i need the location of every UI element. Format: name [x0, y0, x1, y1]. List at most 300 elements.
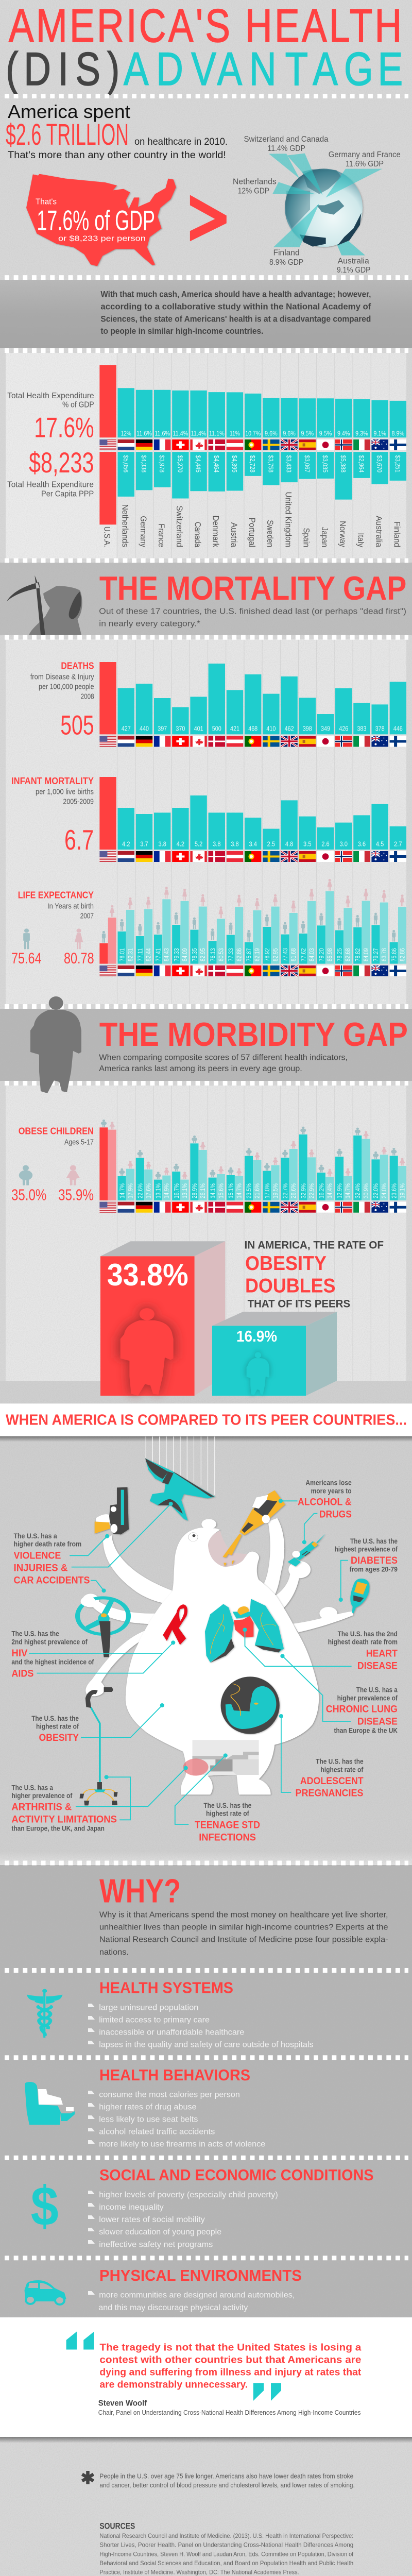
deaths values: 398 [303, 725, 312, 733]
callout: diabetes [335, 1537, 398, 1573]
footnote text: and cancer, better control of blood pressure and cholesterol levels, and lower rates of smoking. [99, 2482, 355, 2489]
callout: alcohol and drugs: DRUGS [319, 1509, 352, 1520]
callout: chronic lung disease: CHRONIC LUNG [326, 1704, 398, 1715]
callout: heart disease [328, 1630, 398, 1671]
callout: alcohol and drugs: ALCOHOL & [298, 1497, 352, 1508]
infant values: 3.8 [158, 841, 166, 848]
heading: SOCIAL AND ECONOMIC CONDITIONS [99, 2166, 374, 2184]
icon: bottle [223, 1490, 285, 1567]
callout: violence, injuries, car accidents: INJURIES & [13, 1562, 68, 1573]
bullet text: more communities are designed around automobiles, [99, 2291, 295, 2300]
obesity values: 14.7% [118, 1183, 126, 1198]
bullet list: slower education of young people [99, 2228, 221, 2236]
per capita values: $5,056 [122, 455, 130, 472]
globe labels: Germany and France [329, 150, 401, 159]
map text: or $8,233 per person [58, 234, 146, 243]
quote text: The tragedy is not that the United States is losing a [99, 2342, 362, 2353]
footnote text: People in the U.S. over age 75 live longer. Americans also have lower death rates from stroke [99, 2472, 353, 2480]
icon: caduceus [27, 1989, 62, 2038]
intro paragraph band: according to a collaborative study within the National Academy of [100, 302, 371, 311]
icon: ribbon [163, 1604, 187, 1645]
percent values: 11.4% [173, 430, 188, 437]
life expectancy values: 82.95 [271, 948, 279, 961]
country names: Australia [374, 516, 383, 548]
country names: U.S.A. [102, 527, 111, 547]
life expectancy values: 77.62 [299, 948, 307, 961]
infant values: 4.5 [376, 841, 384, 848]
bullet text: and this may discourage physical activity [98, 2303, 248, 2312]
icon: male legend [23, 928, 30, 949]
infant values: 3.8 [231, 841, 239, 848]
subheading [99, 607, 406, 629]
globe labels: 8.9% GDP [269, 258, 303, 267]
deaths values: 410 [266, 725, 276, 733]
callout: violence, injuries, car accidents [13, 1532, 90, 1586]
callout: alcohol and drugs: more years to [311, 1487, 352, 1495]
globe [285, 168, 363, 247]
chart left labels: Total Health Expenditure [7, 392, 94, 400]
flag row [99, 965, 406, 976]
intro paragraph band: Sciences, the state of Americans' health is at a disadvantage compared [100, 314, 371, 324]
obesity doubles text: THAT OF ITS PEERS [248, 1298, 350, 1310]
callout: arthritis and activity limitations: ARTHRITIS & [11, 1802, 72, 1813]
country names: Italy [356, 533, 365, 548]
strings [146, 1436, 215, 1495]
quote text: are demonstrably unnecessary. [99, 2379, 248, 2391]
percent values: 9.5% [301, 430, 314, 437]
icon: gun [95, 1487, 129, 1534]
bullet list: inaccessible or unaffordable healthcare [99, 2028, 244, 2037]
icon: opening quote marks [66, 2332, 94, 2349]
obesity values: 22.9% [307, 1183, 315, 1198]
flag row [99, 736, 406, 747]
callout: arthritis and activity limitations: higher prevalence of [11, 1792, 73, 1800]
callout: obesity: highest rate of [36, 1723, 79, 1731]
deaths values: 446 [393, 725, 403, 733]
sources heading: SOURCES [99, 2521, 135, 2531]
life expectancy values: 82.19 [253, 948, 261, 961]
icon: fetus in womb [221, 1676, 280, 1734]
country names: Netherlands [121, 504, 130, 547]
bear body [126, 1519, 319, 1794]
deaths labels: per 100,000 people [39, 683, 94, 691]
obesity values: 17.0% [263, 1183, 271, 1198]
callout: HIV and AIDS: AIDS [11, 1668, 33, 1679]
callout: alcohol and drugs: Americans lose [305, 1479, 352, 1487]
life expectancy values: 77.43 [281, 948, 289, 961]
life expectancy values: 82.31 [126, 948, 134, 961]
chart: infant mortality [11, 775, 406, 862]
bullet list: ineffective safety net programs [99, 2240, 213, 2249]
spending text block [6, 101, 228, 161]
paragraph: Why is it that Americans spend the most money on healthcare yet live shorter, [99, 1911, 388, 1920]
footnote [82, 2471, 355, 2489]
deaths bars [99, 662, 406, 734]
deaths values: 370 [176, 725, 185, 733]
obesity values: 15.1% [227, 1183, 235, 1198]
beam behind globe: Australia [334, 237, 365, 256]
life expectancy values: 84.43 [163, 948, 170, 961]
deaths labels: 505 [60, 710, 94, 740]
country names: United Kingdom [283, 492, 293, 547]
bullet list: alcohol related traffic accidents [99, 2128, 215, 2137]
callout: chronic lung disease: The U.S. has a [356, 1686, 398, 1694]
flag row [99, 851, 406, 862]
callout: heart disease: The U.S. has the 2nd [338, 1630, 398, 1638]
icon: closing quote marks [253, 2383, 281, 2401]
life expectancy values: 77.41 [154, 948, 162, 961]
bullet markers [88, 2091, 95, 2144]
heading: HEALTH BEHAVIORS [99, 2066, 250, 2084]
icon: obese figure [121, 1308, 174, 1396]
obese children labels: 35.0% [11, 1185, 46, 1204]
deaths values: 421 [230, 725, 239, 733]
spending text block: That's more than any other country in the world! [8, 150, 226, 161]
callout: teenage STD infections: TEENAGE STD [195, 1819, 260, 1831]
arms [82, 1498, 353, 1696]
bullet list: lapses in the quality and safety of care outside of hospitals [99, 2041, 314, 2049]
infant values: 3.5 [303, 841, 312, 848]
country names: Germany [139, 516, 148, 548]
obese children labels: Ages 5-17 [64, 1139, 94, 1147]
icon: asterisk [82, 2471, 94, 2484]
life expectancy values: 78.25 [336, 948, 344, 961]
country names: Denmark [211, 515, 220, 548]
infant mortality bars [99, 777, 406, 850]
quote text: contest with other countries but that Americans are [99, 2354, 361, 2366]
percent values: 9.4% [337, 430, 350, 437]
per capita values: $4,395 [231, 455, 238, 472]
percent values: 11.6% [136, 430, 152, 437]
globe labels: Australia [338, 257, 369, 266]
infant labels: per 1,000 live births [36, 788, 94, 796]
3d bar: peers obesity 16.9% [212, 1312, 337, 1396]
infant values: 3.6 [358, 841, 366, 848]
life expectancy values: 79.33 [173, 948, 180, 961]
obesity values: 30.9% [362, 1183, 370, 1198]
bullet list: income inequality [99, 2203, 164, 2212]
bullet list: large uninsured population [99, 2004, 198, 2012]
life expectancy values: 75.86 [390, 948, 398, 961]
country names: Japan [320, 527, 329, 547]
deaths labels: from Disease & Injury [30, 673, 94, 681]
obesity values: 14.4% [325, 1183, 334, 1198]
deaths values: 427 [122, 725, 131, 733]
chart left labels [7, 392, 94, 499]
bullet list: more likely to use firearms in acts of violence [99, 2140, 265, 2149]
life expectancy values: 78.35 [191, 948, 198, 961]
percent values: 10.7% [245, 430, 261, 437]
eye [188, 1533, 198, 1541]
globe labels: 11.4% GDP [267, 144, 305, 153]
percent values: 11.1% [209, 430, 225, 437]
flag row [99, 439, 406, 450]
obesity values: 26.6% [289, 1183, 297, 1198]
life expectancy values: 78.01 [118, 948, 126, 961]
per capita values: $2,728 [249, 455, 256, 472]
obesity values: 32.9% [299, 1183, 307, 1198]
panel: why [99, 1872, 388, 1957]
obesity values: 28.9% [191, 1183, 198, 1198]
title line 1: AMERICA'S HEALTH [9, 0, 402, 52]
chart: health expenditure [7, 365, 406, 548]
obesity values: 14.1% [209, 1183, 216, 1198]
infant values: 3.4 [249, 841, 257, 848]
spending text block: America spent [8, 101, 130, 122]
obesity values: 17.9% [126, 1183, 134, 1198]
bullet text [98, 2291, 295, 2312]
callout: arthritis and activity limitations [11, 1784, 117, 1832]
obesity doubles text: DOUBLES [245, 1275, 336, 1297]
icon: steering wheel [78, 1596, 128, 1657]
life expectancy bars and people [23, 879, 406, 964]
callout: violence, injuries, car accidents: CAR ACCIDENTS [13, 1574, 90, 1586]
bullet list: limited access to primary care [99, 2016, 210, 2025]
chart: deaths [30, 660, 406, 747]
life expectancy values: 82.95 [199, 948, 207, 961]
life expectancy labels: 2007 [80, 912, 94, 920]
subheading: When comparing composite scores of 57 different health indicators, [99, 1053, 348, 1062]
obesity doubles text: OBESITY [245, 1252, 327, 1275]
map text: That's [36, 198, 57, 207]
bullet markers [88, 2191, 95, 2244]
life expectancy labels: 75.64 [11, 950, 42, 967]
subheading: in nearly every category.* [99, 620, 200, 629]
life expectancy values: 80.53 [217, 948, 225, 961]
per capita values: $3,035 [321, 455, 329, 472]
callout: chronic lung disease: than Europe & the UK [334, 1726, 398, 1734]
obesity values: 24.0% [380, 1183, 388, 1198]
subheading [99, 1053, 348, 1073]
obesity values: 22.0% [372, 1183, 380, 1198]
callout: violence, injuries, car accidents: The U.S. has a [13, 1532, 57, 1540]
life expectancy values [118, 948, 406, 961]
bullet list: less likely to use seat belts [99, 2115, 198, 2124]
country names: Norway [338, 521, 347, 548]
infant values: 2.7 [394, 841, 402, 848]
infant labels: 2005-2009 [63, 798, 94, 806]
data beams [269, 154, 382, 247]
bullet list: higher rates of drug abuse [99, 2103, 197, 2112]
obese children labels [11, 1126, 94, 1204]
censored pixel block [183, 1740, 259, 1776]
country names: Spain [302, 528, 311, 547]
chart: obese children [11, 1120, 406, 1213]
callout: adolescent pregnancies: PREGNANCIES [296, 1788, 364, 1799]
callout: arthritis and activity limitations: ACTIVITY LIMITATIONS [11, 1814, 117, 1825]
obesity values [118, 1183, 406, 1198]
callout: HIV and AIDS: and the highest incidence of [11, 1658, 94, 1666]
country names [102, 492, 402, 548]
chart left labels: % of GDP [62, 401, 94, 410]
infant values [122, 841, 402, 848]
deaths values: 426 [339, 725, 348, 733]
bullet list: lower rates of social mobility [99, 2215, 205, 2224]
callout: teenage STD infections: INFECTIONS [199, 1832, 256, 1843]
spending text block: on healthcare in 2010. [134, 136, 228, 147]
intro paragraph band: With that much cash, America should have a health advantage; however, [100, 290, 371, 299]
panel: quote: Chair, Panel on Understanding Cross-National Health Differences Among High-Income Countries [98, 2409, 361, 2416]
infant labels: INFANT MORTALITY [11, 775, 94, 786]
title line 2: (DIS): (DIS) [6, 43, 119, 95]
callout: chronic lung disease: higher prevalence of [337, 1694, 398, 1702]
obesity values: 16.2% [317, 1183, 325, 1198]
deaths values: 397 [158, 725, 167, 733]
globe labels: 12% GDP [238, 187, 269, 196]
attribution: Steven Woolf [98, 2399, 147, 2408]
callout: HIV and AIDS: The U.S. has the [11, 1630, 59, 1638]
country names: Sweden [265, 520, 274, 547]
per capita values: $3,433 [285, 455, 293, 472]
globe labels: 11.6% GDP [346, 160, 384, 168]
icon: obese silhouette [30, 996, 81, 1093]
sources text: Shorter Lives, Poorer Health. Panel on Understanding Cross-National Health Differences Among [99, 2541, 353, 2549]
quote text [99, 2342, 362, 2391]
obesity values: 14.9% [163, 1183, 170, 1198]
white banner heading [0, 1403, 412, 1442]
life expectancy values: 82.68 [344, 948, 352, 961]
panel: health systems [27, 1979, 314, 2049]
obesity values: 22.6% [136, 1183, 144, 1198]
icon: syringe [288, 1534, 326, 1567]
sources text [99, 2532, 354, 2576]
callout: HIV and AIDS [11, 1630, 94, 1679]
spending text block: $2.6 TRILLION [6, 118, 129, 151]
sources [99, 2521, 354, 2576]
percent values: 9.6% [265, 430, 278, 437]
globe labels: 9.1% GDP [337, 266, 370, 275]
life expectancy values: 82.86 [398, 948, 406, 961]
callout: violence, injuries, car accidents: higher death rate from [13, 1540, 81, 1548]
life expectancy values: 82.86 [235, 948, 243, 961]
footnote text [99, 2472, 355, 2489]
map shape [26, 174, 176, 266]
subheading: Out of these 17 countries, the U.S. finished dead last (or perhaps "dead first") [99, 607, 406, 616]
per capita values: $4,464 [213, 455, 220, 472]
life expectancy values: 78.82 [354, 948, 362, 961]
paragraph: nations. [99, 1948, 129, 1957]
callout: adolescent pregnancies: The U.S. has the [316, 1758, 364, 1766]
life expectancy values: 84.03 [307, 948, 315, 961]
continents [286, 169, 362, 247]
obesity values: 14.7% [235, 1183, 243, 1198]
icon: boy legend [19, 1165, 32, 1185]
deaths values: 440 [140, 725, 149, 733]
life expectancy values: 85.98 [325, 948, 334, 961]
deaths values: 401 [194, 725, 203, 733]
life expectancy values: 82.44 [144, 948, 152, 961]
obesity doubles text [244, 1239, 384, 1310]
infant values: 3.8 [213, 841, 221, 848]
country names: Switzerland [175, 505, 184, 547]
bullet list [99, 2191, 278, 2249]
life expectancy values: 81.68 [289, 948, 297, 961]
sources text: Practice, Institute of Medicine. Washington, DC: The National Academies Press. [99, 2569, 299, 2576]
deaths values: 462 [285, 725, 294, 733]
per capita values: $4,338 [140, 455, 148, 472]
per capita values: $4,445 [195, 455, 202, 472]
illustration: many-armed bear [29, 1436, 369, 1824]
obesity values: 19.5% [271, 1183, 279, 1198]
life expectancy values: 77.33 [227, 948, 235, 961]
chart left labels: $8,233 [29, 446, 94, 479]
callout: diabetes: The U.S. has the [350, 1537, 398, 1545]
obesity values: 13.1% [181, 1183, 188, 1198]
icon: armchair [25, 2082, 75, 2125]
deaths values: 383 [357, 725, 366, 733]
callout: adolescent pregnancies [296, 1758, 364, 1799]
per capita values: $3,758 [267, 455, 274, 472]
life expectancy labels: LIFE EXPECTANCY [18, 890, 94, 901]
icon: girl legend [66, 1165, 80, 1185]
chart left labels: Total Health Expenditure [7, 481, 94, 489]
flag row [99, 1202, 406, 1213]
globe labels: Netherlands [233, 178, 277, 187]
obesity values: 32.4% [354, 1183, 362, 1198]
sources text: Behavioral and Social Sciences and Education, and Board on Population Health and Public Health [99, 2560, 353, 2567]
map text [36, 198, 155, 243]
callout: diabetes: from ages 20-79 [350, 1566, 398, 1573]
infant values: 5.2 [195, 841, 202, 848]
obesity values: 26.1% [199, 1183, 207, 1198]
sources text: High-Income Countries, Steven H. Woolf and Laudan Aron, Eds. Committee on Population, Division of [99, 2550, 354, 2557]
infant labels [11, 775, 94, 856]
panel: quote [0, 2317, 412, 2443]
obesity values: 22.7% [281, 1183, 289, 1198]
callout: heart disease: HEART [366, 1648, 398, 1659]
country names: Portugal [247, 518, 256, 547]
obesity values: 23.5% [245, 1183, 253, 1198]
percent values: 8.9% [392, 430, 404, 437]
life expectancy values: 83.78 [380, 948, 388, 961]
globe labels: Switzerland and Canada [244, 135, 329, 144]
icon: lungs and heart [205, 1599, 284, 1663]
heading: WHY? [99, 1872, 181, 1909]
callout: teenage STD infections: highest rate of [206, 1810, 249, 1818]
quote text: dying and suffering from illness and injury at rates that [99, 2367, 362, 2378]
callout: arthritis and activity limitations: The U.S. has a [11, 1784, 53, 1791]
heading: HEALTH SYSTEMS [99, 1979, 233, 1997]
intro paragraph band: to people in similar high-income countries. [100, 327, 263, 336]
callout: chronic lung disease [326, 1686, 398, 1734]
infant values: 2.6 [321, 841, 330, 848]
chart left labels: 17.6% [34, 412, 94, 444]
callout: HIV and AIDS: 2nd highest prevalence of [11, 1638, 88, 1646]
life expectancy values: 78.92 [263, 948, 271, 961]
deaths values: 378 [375, 725, 385, 733]
country names: France [157, 523, 166, 547]
obesity values: 23.6% [390, 1183, 398, 1198]
life expectancy labels: 80.78 [64, 950, 94, 967]
callout: violence, injuries, car accidents: VIOLENCE [13, 1550, 61, 1561]
callout dots [101, 1499, 343, 1779]
obese children labels: 35.9% [58, 1185, 94, 1204]
mouth [208, 1531, 247, 1567]
callout: alcohol and drugs [298, 1479, 352, 1520]
deaths labels [30, 660, 94, 740]
heading: PHYSICAL ENVIRONMENTS [99, 2266, 302, 2284]
bullet list [99, 2091, 265, 2149]
obesity values: 15.6% [217, 1183, 225, 1198]
value: 33.8% [107, 1258, 188, 1292]
paragraph: unhealthier lives than people in similar high-income countries? Experts at the [99, 1923, 388, 1932]
life expectancy values: 79.20 [317, 948, 325, 961]
percent values: 9.1% [373, 430, 386, 437]
country names: Canada [193, 522, 202, 548]
callout: HIV and AIDS: HIV [11, 1648, 27, 1659]
callout: diabetes: DIABETES [351, 1555, 398, 1566]
obesity values: 16.7% [173, 1183, 180, 1198]
